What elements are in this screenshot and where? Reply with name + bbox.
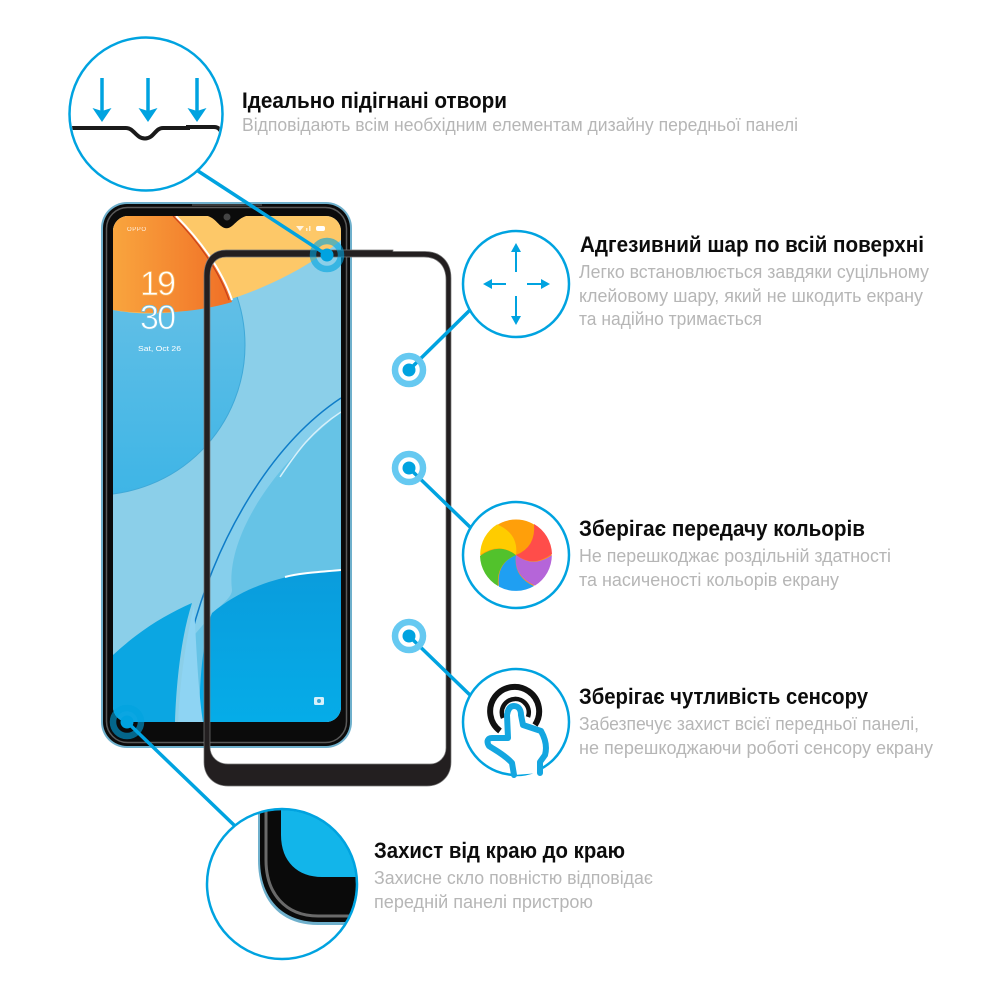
phone <box>101 202 352 748</box>
cutout edge line <box>70 127 221 138</box>
three down arrows <box>92 78 206 122</box>
marker: top notch <box>313 241 341 269</box>
colour wheel <box>471 520 561 602</box>
touch hand <box>488 706 546 775</box>
text: touch: Забезпечує захист всієї передньої панелі, <box>579 713 919 734</box>
wallpaper <box>113 216 341 722</box>
clock 19 30: 30 <box>140 299 176 337</box>
text: edge to edge: передній панелі пристрою <box>374 891 593 912</box>
clock 19 30 <box>138 265 181 353</box>
clock 19 30: Sat, Oct 26 <box>138 344 181 353</box>
status bar <box>127 226 325 233</box>
text: colours <box>579 545 891 590</box>
callout circle: edge to edge <box>207 800 360 959</box>
heading: edge to edge: Захист від краю до краю <box>374 838 625 863</box>
text: colours: Не перешкоджає роздільній здатності <box>579 545 891 566</box>
callout circle: touch <box>463 669 569 775</box>
text: adhesive <box>579 261 930 329</box>
heading: adhesive: Адгезивний шар по всій поверхні <box>580 232 924 257</box>
text: edge to edge: Захисне скло повністю відповідає <box>374 867 653 888</box>
heading: cutouts: Ідеально підігнані отвори <box>242 88 507 113</box>
status bar: OPPO <box>127 227 146 233</box>
touch rings <box>490 687 539 731</box>
four-way arrows <box>483 243 550 325</box>
text: adhesive: та надійно тримається <box>579 308 762 329</box>
callout circle: adhesive <box>463 231 569 337</box>
marker: corner <box>113 708 141 736</box>
connector lines <box>127 171 471 826</box>
callout circle: colours <box>463 502 569 608</box>
text: adhesive: Легко встановлюється завдяки суцільному <box>579 261 930 282</box>
glass panel frame <box>204 250 451 786</box>
text: edge to edge <box>374 867 653 912</box>
marker: colours <box>395 454 423 482</box>
text: colours: та насиченості кольорів екрану <box>579 569 840 590</box>
marker: adhesive <box>395 356 423 384</box>
notch and camera <box>204 215 250 228</box>
marker: sensor <box>395 622 423 650</box>
phone body <box>101 202 352 748</box>
text: adhesive: клейовому шару, який не шкодить екрану <box>579 285 924 306</box>
text: touch: не перешкоджаючи роботі сенсору екрану <box>579 737 934 758</box>
text: cutouts: Відповідають всім необхідним елементам дизайну передньої панелі <box>242 114 798 135</box>
enlarged phone corner <box>258 810 356 925</box>
heading: colours: Зберігає передачу кольорів <box>579 516 865 541</box>
callout circle: cutouts <box>70 38 222 190</box>
heading: touch: Зберігає чутливість сенсору <box>579 684 869 709</box>
clock 19 30: 19 <box>140 265 176 303</box>
text: touch <box>579 713 934 758</box>
camera shortcut icon <box>314 697 324 705</box>
